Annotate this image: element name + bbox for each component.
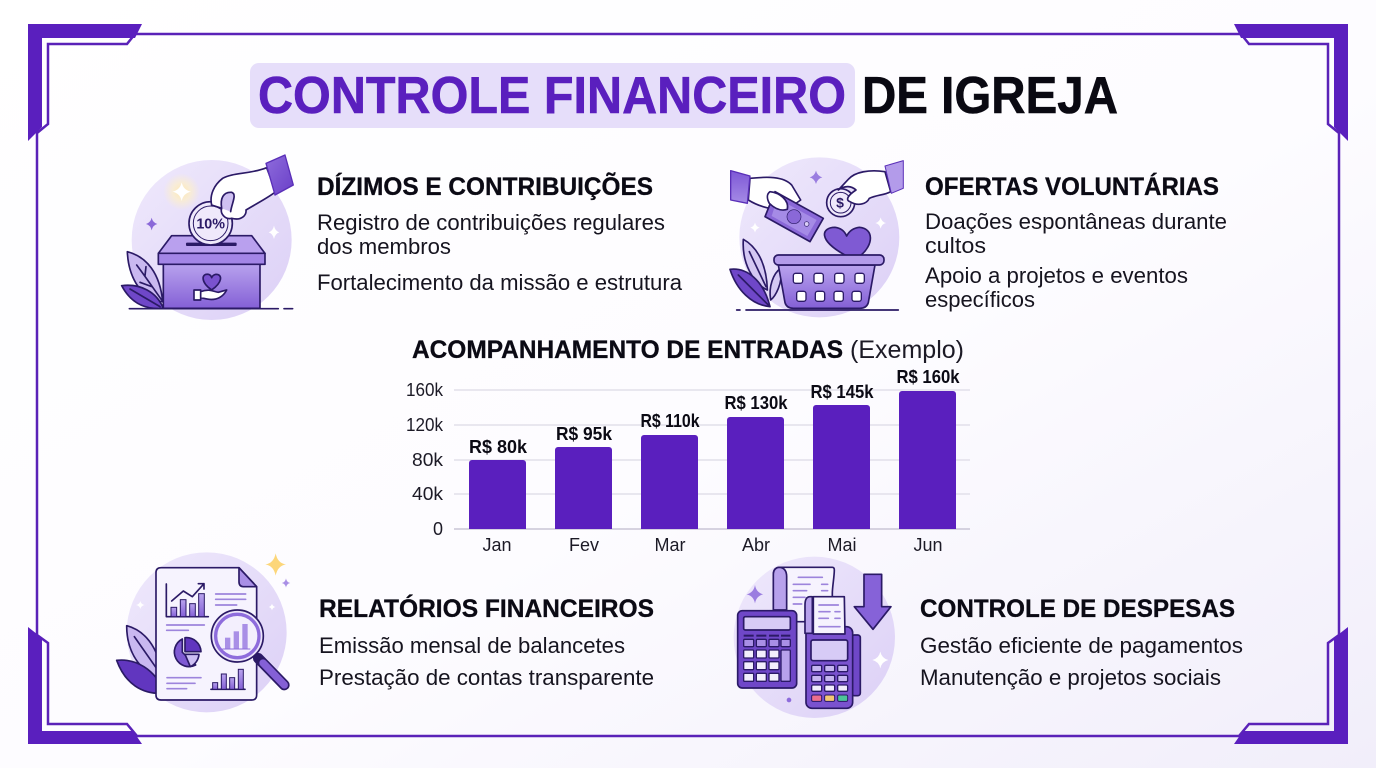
bullets: expenses: Gestão eficiente de pagamentos bbox=[920, 633, 1243, 658]
heading: expenses: CONTROLE DE DESPESAS bbox=[920, 595, 1235, 623]
bullets: reports: Emissão mensal de balancetes bbox=[319, 633, 625, 658]
value labels: R$ 80k bbox=[469, 437, 528, 457]
month labels: Mai bbox=[827, 535, 857, 555]
icon: tithes box bbox=[122, 155, 293, 320]
bullets: reports: Prestação de contas transparente bbox=[319, 665, 654, 690]
value labels: R$ 95k bbox=[556, 424, 613, 444]
y axis labels: 80k bbox=[412, 450, 444, 470]
bullets: tithes: Fortalecimento da missão e estrutura bbox=[317, 270, 683, 295]
month labels bbox=[482, 535, 943, 555]
value labels: R$ 110k bbox=[640, 411, 700, 431]
value labels bbox=[469, 367, 960, 457]
y axis labels: 160k bbox=[406, 380, 444, 400]
y axis labels bbox=[406, 380, 444, 539]
y axis labels: 0 bbox=[433, 519, 443, 539]
chart title: (Exemplo) bbox=[850, 336, 964, 364]
title highlight bbox=[250, 63, 855, 128]
month labels: Abr bbox=[742, 535, 770, 555]
icon: tithes box: 10% bbox=[196, 217, 225, 233]
text block: expenses bbox=[920, 595, 1243, 690]
bullets: offerings: Doações espontâneas durante bbox=[925, 209, 1227, 234]
y axis labels: 40k bbox=[412, 484, 444, 504]
value labels: R$ 160k bbox=[896, 367, 960, 387]
month labels: Jan bbox=[482, 535, 512, 555]
bullets: offerings bbox=[925, 209, 1227, 312]
icon: financial report bbox=[117, 552, 290, 712]
icon: offerings basket: $ bbox=[836, 195, 844, 211]
heading: tithes: DÍZIMOS E CONTRIBUIÇÕES bbox=[317, 171, 653, 201]
text block: tithes bbox=[317, 171, 683, 295]
month labels: Fev bbox=[569, 535, 599, 555]
heading: offerings: OFERTAS VOLUNTÁRIAS bbox=[925, 172, 1219, 201]
title text: purple: CONTROLE FINANCEIRO bbox=[258, 67, 846, 125]
y axis labels: 120k bbox=[406, 415, 444, 435]
month labels: Mar bbox=[654, 535, 686, 555]
text block: reports bbox=[319, 593, 654, 690]
heading: reports: RELATÓRIOS FINANCEIROS bbox=[319, 593, 654, 623]
text block: offerings bbox=[925, 172, 1227, 312]
bullets: offerings: Apoio a projetos e eventos bbox=[925, 263, 1188, 288]
gridlines bbox=[454, 390, 970, 529]
value labels: R$ 145k bbox=[810, 382, 874, 402]
month labels: Jun bbox=[913, 535, 943, 555]
icon: offerings basket bbox=[730, 157, 903, 317]
title bbox=[250, 63, 1118, 128]
bullets: reports bbox=[319, 633, 654, 690]
bullets: expenses: Manutenção e projetos sociais bbox=[920, 665, 1221, 690]
bullets: expenses bbox=[920, 633, 1243, 690]
bullets: offerings: cultos bbox=[925, 233, 986, 258]
bullets: offerings: específicos bbox=[925, 287, 1035, 312]
bar chart: entradas bbox=[406, 336, 970, 555]
bullets: tithes: Registro de contribuições regulares bbox=[317, 210, 665, 235]
value labels: R$ 130k bbox=[724, 393, 788, 413]
title text: black: DE IGREJA bbox=[862, 67, 1118, 125]
bars bbox=[469, 391, 956, 529]
icon: expense control bbox=[734, 557, 895, 718]
bullets: tithes: dos membros bbox=[317, 234, 451, 259]
chart title: ACOMPANHAMENTO DE ENTRADAS bbox=[412, 336, 843, 364]
bullets: tithes bbox=[317, 210, 683, 295]
